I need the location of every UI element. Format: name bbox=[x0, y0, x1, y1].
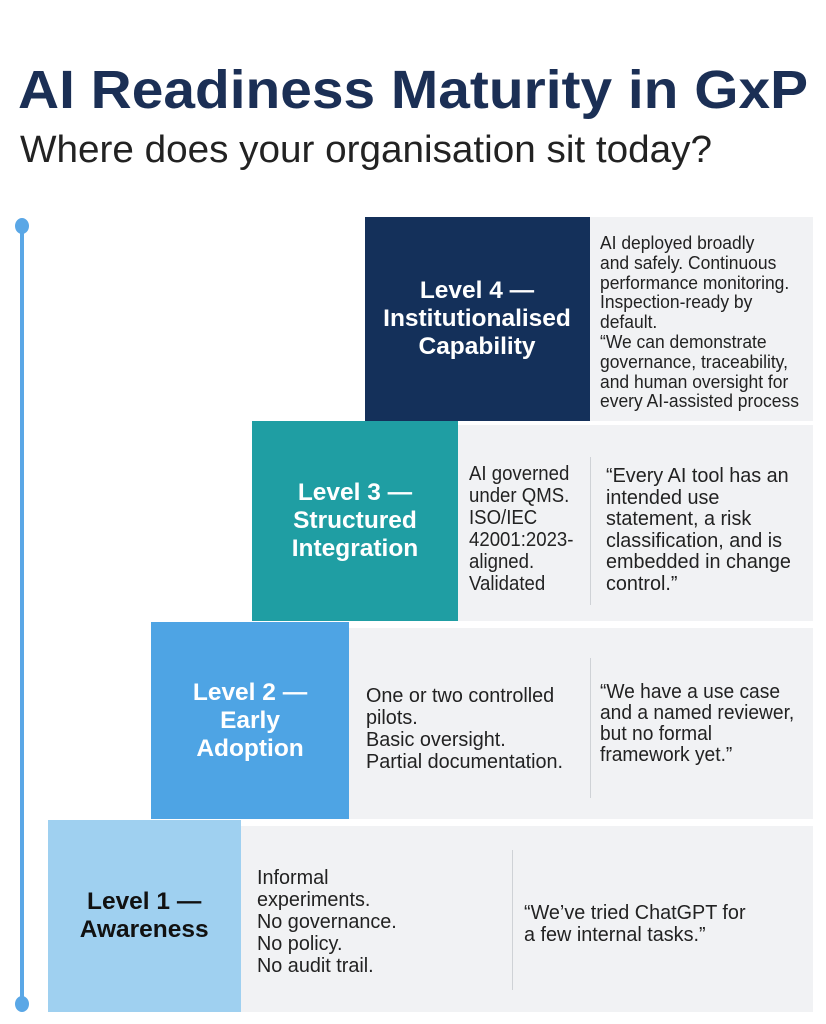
level 2 description: pilots. bbox=[366, 707, 418, 729]
level 3 description: aligned. bbox=[469, 551, 534, 573]
level 4 text: default. bbox=[600, 312, 657, 332]
level 3 description: ISO/IEC bbox=[469, 507, 537, 529]
level 4 text bbox=[600, 233, 799, 411]
level 4 label: Institutionalised bbox=[384, 305, 571, 332]
level 1 label bbox=[48, 820, 241, 1012]
level 3 description: Validated bbox=[469, 573, 545, 595]
level 1 description: Informal bbox=[257, 867, 329, 889]
level 4 text: governance, traceability, bbox=[600, 352, 788, 372]
level 3 quote: statement, a risk bbox=[606, 508, 751, 530]
timeline line bbox=[15, 218, 29, 1012]
level 3 description: AI governed bbox=[469, 463, 569, 485]
level 4 label: Level 4 — bbox=[420, 277, 535, 304]
level 2 quote: but no formal bbox=[600, 723, 712, 745]
level 3 quote: intended use bbox=[606, 486, 719, 508]
level 4 label bbox=[365, 217, 590, 421]
title bbox=[18, 60, 808, 171]
level 2 quote bbox=[600, 681, 794, 766]
level 4 label: Capability bbox=[419, 333, 536, 360]
level 3 description: 42001:2023- bbox=[469, 529, 573, 551]
level 3 label: Integration bbox=[292, 535, 418, 562]
level 3 description bbox=[469, 463, 573, 595]
level 1 description: No governance. bbox=[257, 911, 397, 933]
level 1 quote: “We’ve tried ChatGPT for bbox=[524, 902, 746, 924]
level 2 quote: framework yet.” bbox=[600, 744, 732, 766]
level 3 quote bbox=[606, 465, 791, 594]
level 4 text: and safely. Continuous bbox=[600, 253, 776, 273]
level 2 label bbox=[151, 622, 349, 819]
level 3 label bbox=[252, 421, 458, 621]
level 4 text: Inspection-ready by bbox=[600, 292, 752, 312]
level 2 label: Level 2 — bbox=[193, 678, 307, 706]
level 3 label: Level 3 — bbox=[298, 479, 412, 506]
level 3 quote: “Every AI tool has an bbox=[606, 465, 789, 487]
level 2 description: Partial documentation. bbox=[366, 751, 563, 773]
level 2 quote: and a named reviewer, bbox=[600, 702, 794, 724]
level 3 label: Structured bbox=[293, 507, 417, 534]
subtitle: Where does your organisation sit today? bbox=[20, 129, 712, 171]
panel: level 4 bbox=[365, 217, 813, 421]
level 1 description: No audit trail. bbox=[257, 955, 374, 977]
level 2 quote: “We have a use case bbox=[600, 681, 780, 703]
level 1 description: No policy. bbox=[257, 933, 342, 955]
level 4 text: performance monitoring. bbox=[600, 273, 789, 293]
level 3 quote: classification, and is bbox=[606, 530, 782, 552]
level 2 label: Early bbox=[220, 706, 280, 734]
level 3 quote: embedded in change bbox=[606, 551, 791, 573]
panel: level 3 bbox=[252, 421, 813, 621]
level 2 description bbox=[366, 685, 563, 773]
panel: level 1 bbox=[48, 820, 813, 1012]
level 2 description: Basic oversight. bbox=[366, 729, 506, 751]
level 2 description: One or two controlled bbox=[366, 685, 554, 707]
level 4 text: every AI-assisted process bbox=[600, 391, 799, 411]
level 2 label: Adoption bbox=[196, 734, 304, 762]
level 1 label: Awareness bbox=[80, 916, 209, 943]
level 4 text: AI deployed broadly bbox=[600, 233, 754, 253]
level 1 description: experiments. bbox=[257, 889, 370, 911]
panel: level 2 bbox=[151, 622, 813, 819]
level 1 quote bbox=[524, 902, 746, 946]
level 4 text: “We can demonstrate bbox=[600, 332, 767, 352]
level 4 text: and human oversight for bbox=[600, 372, 788, 392]
level 1 description bbox=[257, 867, 397, 977]
level 1 quote: a few internal tasks.” bbox=[524, 924, 706, 946]
level 3 quote: control.” bbox=[606, 572, 678, 594]
main heading: AI Readiness Maturity in GxP bbox=[18, 60, 808, 120]
level 3 description: under QMS. bbox=[469, 485, 569, 507]
level 1 label: Level 1 — bbox=[87, 888, 202, 915]
